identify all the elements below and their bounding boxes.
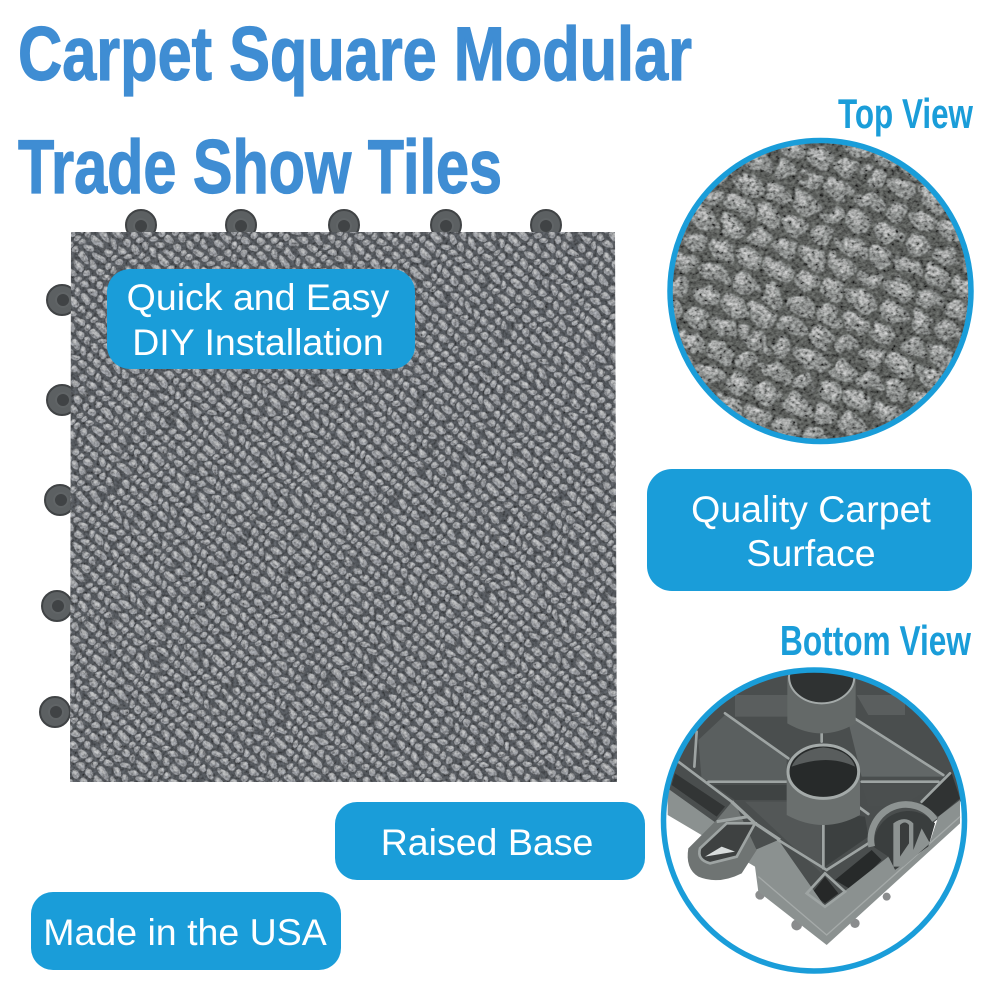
callout: quick and easy: Quick and Easy [127,276,390,318]
callout: quality carpet: Quality Carpet [691,488,931,530]
ribs [678,713,950,907]
callout: raised base: Raised Base [381,821,593,863]
lower cylinder [787,770,860,825]
title: Trade Show Tiles [18,125,502,210]
callout: quality carpet [647,469,972,591]
interlock knobs [40,210,561,727]
tile interior [670,675,960,905]
carpet surface [60,225,625,790]
tile outer wall [668,788,960,945]
callout: quick and easy: DIY Installation [132,321,384,363]
carpet tile photo [40,210,625,790]
carpet fringe under tile [755,890,891,930]
callout: quick and easy [107,269,415,369]
left clip loop [688,800,757,880]
title [18,12,692,210]
title: Carpet Square Modular [18,12,692,97]
callout: quality carpet: Surface [746,532,876,574]
callout: raised base [335,802,645,880]
right clip loop [873,811,935,870]
floor panels [698,715,787,780]
upper cylinder [787,677,856,733]
top view circle [667,138,974,444]
callout: made in the usa [31,892,341,970]
bottom view circle [660,667,968,974]
callout: made in the usa: Made in the USA [43,911,327,953]
knob centres [49,219,553,719]
